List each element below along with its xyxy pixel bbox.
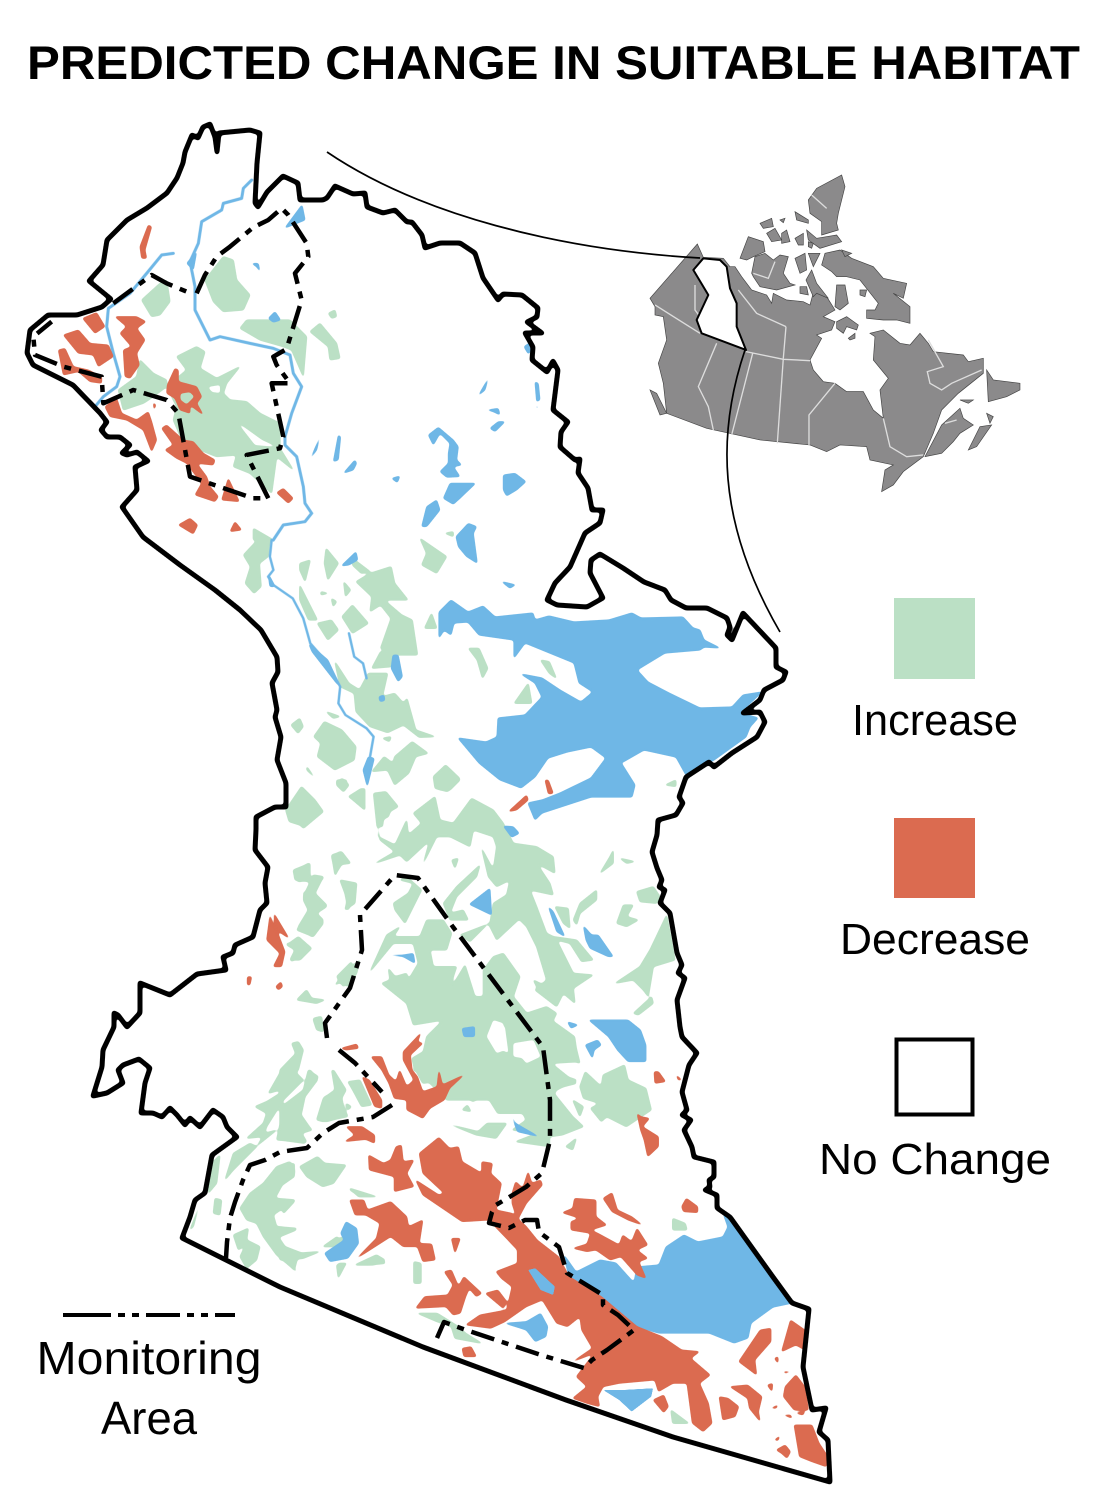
- lakes within the decrease area: [528, 1268, 653, 1412]
- gaps inside the increase areas: [208, 385, 541, 1063]
- title: PREDICTED CHANGE IN SUITABLE HABITAT: [27, 36, 1080, 89]
- habitat map: [27, 124, 830, 1482]
- large northern lake: [439, 600, 762, 820]
- provincial borders: [655, 195, 982, 457]
- monitoring area boundaries: [33, 208, 634, 1368]
- rivers: [95, 180, 374, 757]
- legend: increase: Increase: [852, 696, 1018, 745]
- legend: decrease: [840, 818, 1030, 964]
- legend: decrease: Decrease: [840, 915, 1030, 964]
- large southern lake: [564, 1213, 792, 1343]
- Canadian landmass: [650, 175, 1020, 492]
- legend: no change: [819, 1040, 1051, 1184]
- areas of habitat decrease: [58, 225, 828, 1467]
- region outline: [27, 124, 830, 1482]
- inset map of Canada: [650, 175, 1020, 492]
- lakes: [187, 205, 792, 1343]
- areas of habitat increase: [118, 257, 689, 1423]
- legend: increase: [852, 598, 1018, 745]
- legend: no change: No Change: [819, 1135, 1051, 1184]
- highlighted region on inset: [693, 258, 746, 350]
- legend: monitoring area: [36, 1315, 262, 1444]
- legend: monitoring area: Monitoring: [36, 1332, 262, 1384]
- legend: monitoring area: Area: [101, 1392, 197, 1444]
- locator lines linking map to inset: [327, 152, 780, 632]
